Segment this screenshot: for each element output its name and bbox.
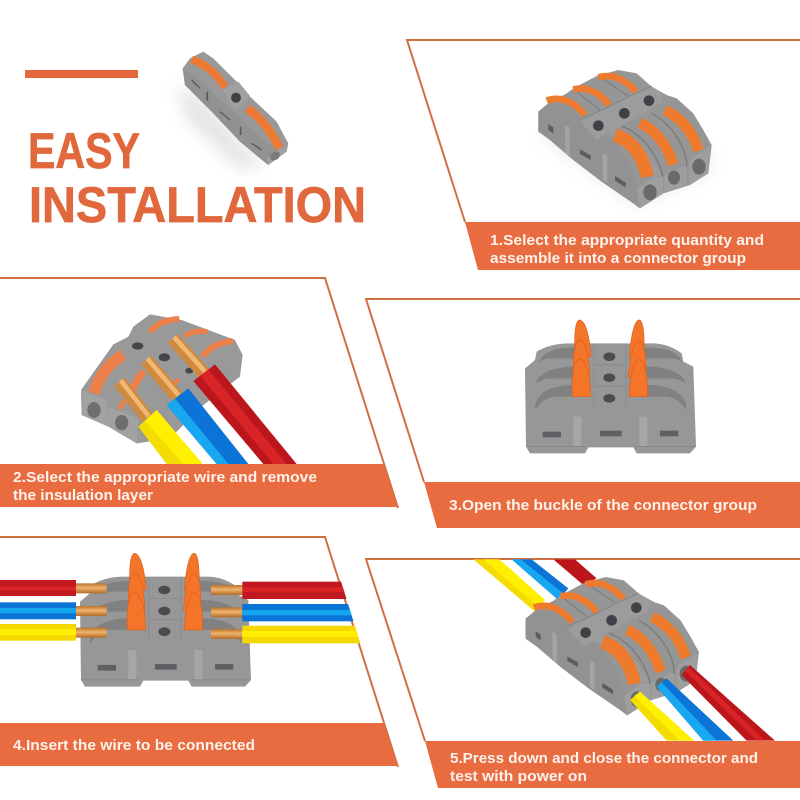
- wires behind connector: [473, 559, 597, 611]
- connector photo: [80, 553, 251, 687]
- connector group photo: [538, 70, 712, 208]
- panel 5 outline: [366, 559, 800, 741]
- closed connector photo: [526, 577, 699, 715]
- caption 2: 2.Select the appropriate wire and remove: [13, 469, 317, 486]
- title: [28, 123, 366, 233]
- banner 5: [425, 741, 800, 788]
- panel 3 outline: [366, 299, 800, 482]
- panel 4 outline: [0, 537, 398, 767]
- caption 5: test with power on: [450, 768, 587, 785]
- caption 5: [450, 750, 758, 785]
- wires in front of connector: [630, 665, 775, 741]
- banner 1: [465, 222, 800, 270]
- title: INSTALLATION: [29, 177, 366, 233]
- connector with stripped wires: [81, 314, 297, 464]
- caption 5: 5.Press down and close the connector and: [450, 750, 758, 767]
- caption 3: 3.Open the buckle of the connector group: [449, 497, 757, 514]
- panel 4: insert wire: [0, 537, 398, 767]
- panel 1: select quantity: [407, 40, 800, 270]
- banner 3: [424, 482, 800, 528]
- caption 4: 4.Insert the wire to be connected: [13, 737, 255, 754]
- banner 4: [0, 723, 398, 766]
- panel 3: open buckle: [366, 299, 800, 528]
- decorative rule: [25, 70, 138, 78]
- panel 2: prepare wire: [0, 278, 398, 508]
- caption 2: the insulation layer: [13, 487, 153, 504]
- caption 1: 1.Select the appropriate quantity and: [490, 232, 764, 249]
- banner 2: [0, 464, 398, 507]
- panel 5: close and test: [366, 559, 800, 788]
- caption 1: assemble it into a connector group: [490, 250, 746, 267]
- panel 1 outline: [407, 40, 800, 222]
- single connector photo: [177, 52, 288, 170]
- caption 2: [13, 469, 317, 504]
- opened connector photo: [525, 320, 696, 453]
- caption 1: [490, 232, 764, 267]
- panel 2 outline: [0, 278, 398, 508]
- inserted wires: [0, 580, 362, 643]
- title: EASY: [28, 123, 140, 179]
